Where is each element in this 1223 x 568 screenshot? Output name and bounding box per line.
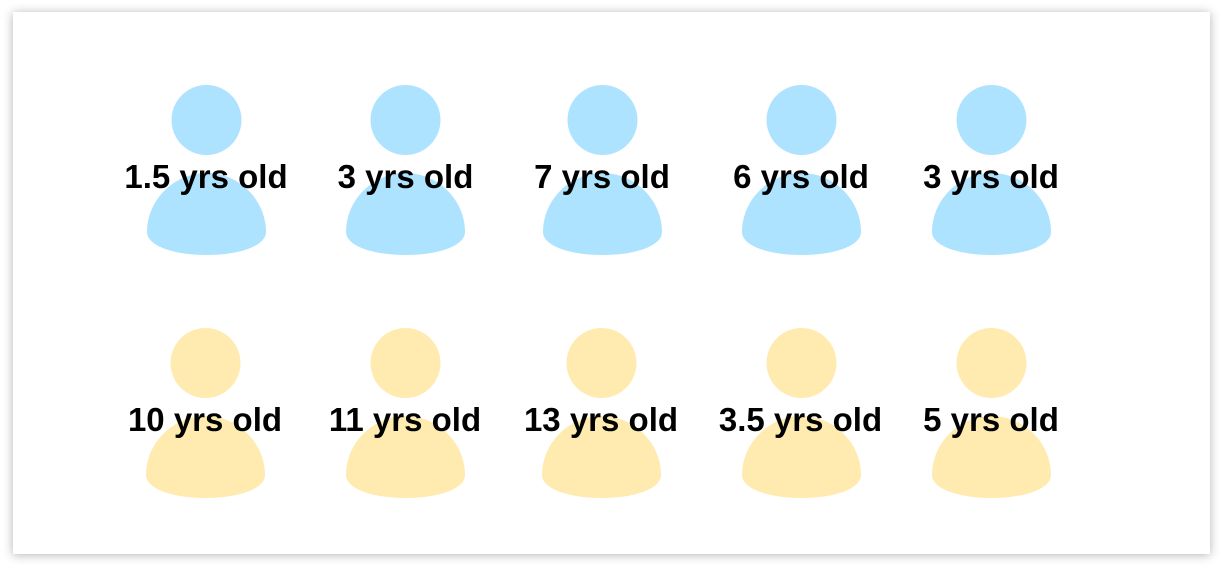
person: 11 yrs old: 11 yrs old [329, 401, 481, 438]
person: 6 yrs old: 6 yrs old [733, 158, 869, 195]
person: 3.5 yrs old [719, 328, 882, 498]
person: 7 yrs old [534, 85, 670, 255]
person: 7 yrs old: 7 yrs old [534, 158, 670, 195]
person: 3 yrs old [338, 85, 473, 255]
person: 11 yrs old [329, 328, 481, 498]
person: 5 yrs old: 5 yrs old [923, 401, 1059, 438]
person: 3 yrs old: 3 yrs old [338, 158, 473, 195]
person: 3 yrs old [923, 85, 1059, 255]
row: blue people [124, 85, 1059, 255]
person: 5 yrs old [923, 328, 1059, 498]
person: 13 yrs old [524, 328, 678, 498]
person: 1.5 yrs old: 1.5 yrs old [124, 158, 288, 195]
row: yellow people [128, 328, 1059, 498]
person: 10 yrs old: 10 yrs old [128, 401, 282, 438]
person: 6 yrs old [733, 85, 869, 255]
person: 3 yrs old: 3 yrs old [923, 158, 1059, 195]
person: 10 yrs old [128, 328, 282, 498]
person: 3.5 yrs old: 3.5 yrs old [719, 401, 882, 438]
person: 1.5 yrs old [124, 85, 288, 255]
person: 13 yrs old: 13 yrs old [524, 401, 678, 438]
